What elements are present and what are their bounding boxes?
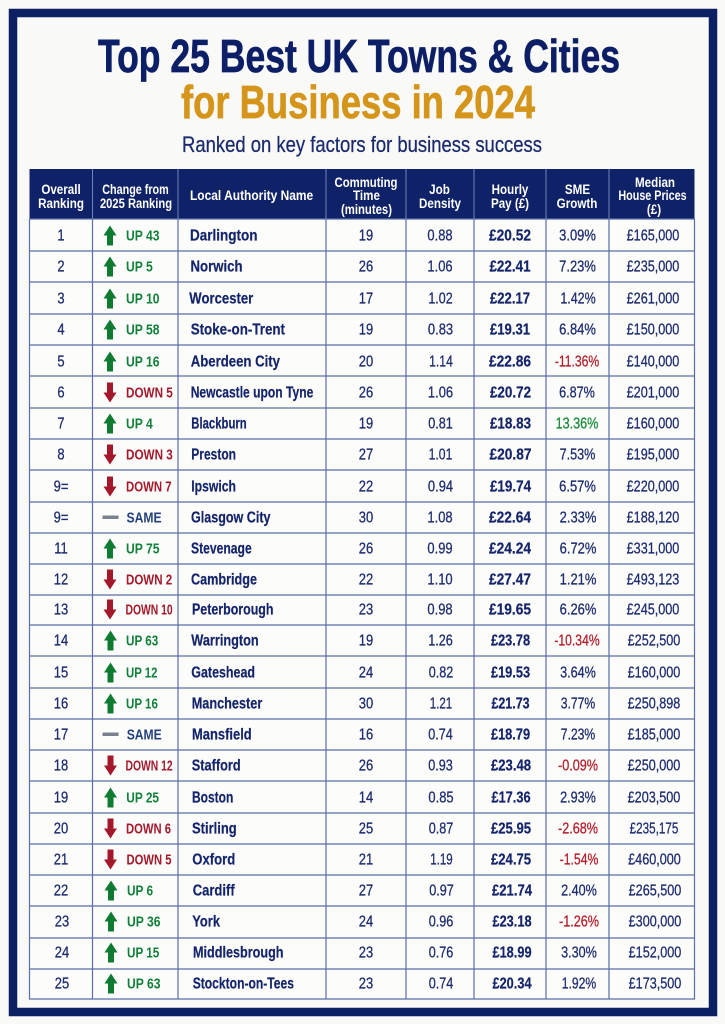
row 5: Aberdeen City: £22.86 — [489, 353, 531, 371]
row 3: Worcester: Worcester — [189, 290, 253, 308]
row 6: Newcastle upon Tyne: £201,000 — [627, 384, 679, 402]
row 13: Peterborough: DOWN 10 — [126, 601, 173, 618]
table header labels: Change from — [102, 182, 169, 197]
row 16: Manchester: 3.77% — [561, 695, 596, 713]
row 12: Cambridge: 12 — [54, 571, 68, 589]
row 10: Glasgow City: 30 — [359, 509, 373, 527]
row 20: Stirling: -2.68% — [558, 820, 598, 838]
row 11: Stevenage — [54, 538, 679, 558]
row 4: Stoke-on-Trent: £19.31 — [490, 321, 530, 339]
row 20: Stirling — [54, 818, 679, 838]
row 17: Mansfield: £185,000 — [628, 726, 680, 744]
row 25: Stockton-on-Tees: Stockton-on-Tees — [193, 976, 294, 992]
row 24: Middlesbrough: 24 — [55, 944, 69, 962]
row 21: Oxford: £24.75 — [491, 851, 531, 869]
row 18: Stafford — [54, 756, 680, 776]
row 16: Manchester: £250,898 — [628, 695, 680, 713]
row 23: York: 23 — [55, 913, 69, 931]
row 23: York: 24 — [359, 913, 373, 931]
row 18: Stafford: 26 — [359, 757, 373, 775]
row 2: Norwich: UP 5 — [126, 258, 153, 275]
row 24: Middlesbrough: 0.76 — [429, 944, 453, 962]
row 8: Preston: DOWN 3 — [126, 446, 173, 463]
table header background — [30, 169, 694, 219]
row 4: Stoke-on-Trent: 0.83 — [428, 321, 453, 339]
row 7: Blackburn: £18.83 — [490, 416, 531, 433]
row 16: Manchester: Manchester — [192, 696, 262, 712]
row 17: Mansfield: 17 — [54, 726, 68, 744]
row 12: Cambridge: £27.47 — [489, 571, 531, 589]
row 23: York: -1.26% — [559, 913, 599, 931]
row 23: York: UP 36 — [127, 913, 161, 930]
row 7: Blackburn — [57, 414, 679, 434]
row 6: Newcastle upon Tyne: 26 — [359, 384, 373, 402]
table header labels: (£) — [647, 201, 661, 217]
row 8: Preston: 27 — [359, 446, 373, 464]
row 22: Cardiff: £265,500 — [629, 882, 681, 900]
table header labels: Commuting — [335, 174, 397, 190]
table header labels: Local Authority Name — [190, 187, 313, 203]
row 21: Oxford: DOWN 5 — [126, 851, 171, 868]
row 15: Gateshead: Gateshead — [191, 664, 255, 682]
row 8: Preston: £20.87 — [489, 446, 532, 464]
row 18: Stafford: DOWN 12 — [126, 757, 173, 774]
table header labels: Growth — [557, 195, 597, 211]
row 21: Oxford: -1.54% — [560, 851, 599, 869]
row 5: Aberdeen City: £140,000 — [627, 353, 679, 371]
row 19: Boston: 2.93% — [560, 789, 596, 807]
row 18: Stafford: -0.09% — [558, 757, 598, 775]
row 12: Cambridge — [54, 570, 679, 590]
row 16: Manchester: UP 16 — [126, 695, 158, 712]
row 6: Newcastle upon Tyne: £20.72 — [490, 385, 531, 402]
row 24: Middlesbrough — [55, 942, 681, 962]
row 20: Stirling: £25.95 — [491, 820, 531, 838]
row 1: Darlington: 0.88 — [427, 227, 453, 245]
row 7: Blackburn: Blackburn — [191, 416, 247, 432]
row 4: Stoke-on-Trent: 4 — [57, 321, 65, 339]
row 8: Preston: Preston — [191, 446, 236, 464]
row 16: Manchester: 30 — [359, 695, 373, 713]
table header labels: 2025 Ranking — [100, 196, 172, 211]
row 21: Oxford — [54, 850, 681, 870]
row 12: Cambridge: 22 — [359, 571, 373, 589]
row 11: Stevenage: 6.72% — [560, 540, 596, 558]
row 14: Warrington: £252,500 — [628, 632, 680, 650]
row 6: Newcastle upon Tyne — [57, 382, 679, 402]
row 15: Gateshead: 0.82 — [429, 664, 453, 682]
row 19: Boston: 0.85 — [428, 789, 454, 807]
row 3: Worcester — [57, 288, 679, 308]
row 16: Manchester — [54, 694, 680, 714]
row 15: Gateshead: 15 — [54, 664, 68, 682]
table header labels: Overall — [41, 181, 81, 197]
row 3: Worcester: 1.42% — [560, 290, 596, 308]
row 4: Stoke-on-Trent: £150,000 — [627, 321, 679, 339]
row 17: Mansfield: 0.74 — [428, 726, 453, 744]
row 11: Stevenage: 26 — [359, 540, 373, 558]
row 17: Mansfield: 7.23% — [561, 726, 596, 744]
row 16: Manchester: £21.73 — [491, 695, 530, 713]
row 24: Middlesbrough: UP 15 — [127, 944, 160, 961]
row 10: Glasgow City: £188,120 — [627, 509, 679, 527]
row 9: Ipswich: DOWN 7 — [126, 478, 172, 495]
table header labels: Median — [635, 174, 675, 190]
row 20: Stirling: 0.87 — [429, 820, 453, 838]
table header labels — [38, 174, 687, 217]
row 22: Cardiff: Cardiff — [193, 882, 235, 900]
row 18: Stafford: 18 — [54, 757, 68, 775]
row 13: Peterborough: 0.98 — [427, 601, 453, 619]
row 2: Norwich: £235,000 — [627, 258, 679, 276]
row 25: Stockton-on-Tees: 1.92% — [562, 975, 597, 993]
table header labels: Hourly — [492, 181, 529, 197]
row 8: Preston: £195,000 — [627, 446, 679, 464]
row 10: Glasgow City: 2.33% — [560, 509, 596, 527]
row 19: Boston: 14 — [359, 789, 373, 807]
row 21: Oxford: 21 — [54, 851, 68, 869]
row 3: Worcester: UP 10 — [126, 290, 160, 307]
row 9: Ipswich: £19.74 — [490, 479, 532, 496]
row 6: Newcastle upon Tyne: Newcastle upon Tyne — [191, 384, 313, 402]
row 12: Cambridge: £493,123 — [627, 571, 679, 589]
row 6: Newcastle upon Tyne: 6.87% — [559, 384, 595, 402]
row 9: Ipswich: 22 — [359, 478, 373, 496]
row 12: Cambridge: DOWN 2 — [126, 571, 172, 588]
row 2: Norwich — [57, 256, 679, 276]
row 17: Mansfield: Mansfield — [192, 726, 252, 744]
row 2: Norwich: 26 — [359, 258, 373, 276]
row 18: Stafford: £250,000 — [628, 757, 680, 775]
row 11: Stevenage: 11 — [54, 540, 68, 558]
row 24: Middlesbrough: £18.99 — [492, 944, 532, 962]
subtitle: Ranked on key factors for business success — [182, 132, 542, 157]
row 22: Cardiff: 2.40% — [561, 882, 597, 900]
table header labels: House Prices — [618, 188, 687, 203]
row 15: Gateshead: £160,000 — [628, 664, 680, 682]
row 16: Manchester: 16 — [54, 695, 68, 713]
row 5: Aberdeen City: Aberdeen City — [191, 354, 280, 370]
row 25: Stockton-on-Tees: 23 — [359, 975, 373, 993]
row 5: Aberdeen City: 20 — [359, 353, 373, 371]
table body background — [30, 219, 694, 999]
row 17: Mansfield: SAME — [127, 726, 162, 743]
row 21: Oxford: £460,000 — [628, 851, 681, 869]
row 25: Stockton-on-Tees: 25 — [55, 975, 69, 993]
row 1: Darlington — [57, 226, 679, 246]
row 20: Stirling: 20 — [54, 820, 68, 838]
row 4: Stoke-on-Trent: UP 58 — [126, 321, 160, 338]
row 14: Warrington: Warrington — [191, 632, 259, 650]
row 19: Boston: 19 — [54, 789, 68, 807]
row 7: Blackburn: 19 — [359, 415, 373, 433]
table header labels: Pay (£) — [491, 195, 529, 211]
row 8: Preston: 7.53% — [560, 446, 596, 464]
row 21: Oxford: 1.19 — [430, 850, 453, 868]
table header labels: Time — [353, 187, 380, 203]
row 23: York — [55, 912, 681, 932]
row 10: Glasgow City: 9= — [54, 509, 68, 527]
row 9: Ipswich — [54, 476, 679, 496]
row 24: Middlesbrough: £152,000 — [629, 944, 681, 962]
row 13: Peterborough: £245,000 — [627, 601, 679, 619]
row 11: Stevenage: 0.99 — [427, 540, 453, 558]
row 14: Warrington: 19 — [359, 632, 373, 650]
row 24: Middlesbrough: Middlesbrough — [193, 944, 284, 962]
row 22: Cardiff: 27 — [359, 882, 373, 900]
row 22: Cardiff — [54, 880, 681, 900]
row 23: York: 0.96 — [429, 913, 453, 931]
row 11: Stevenage: £24.24 — [489, 540, 532, 558]
row 25: Stockton-on-Tees: £173,500 — [629, 975, 681, 993]
row 14: Warrington: 1.26 — [428, 632, 453, 650]
table header labels: Job — [429, 181, 450, 197]
row 22: Cardiff: £21.74 — [492, 882, 533, 900]
row 9: Ipswich: Ipswich — [191, 478, 236, 496]
row 9: Ipswich: 9= — [54, 478, 68, 496]
row 1: Darlington: Darlington — [190, 228, 258, 244]
row 14: Warrington: UP 63 — [126, 632, 158, 649]
row 19: Boston — [54, 788, 680, 808]
row 5: Aberdeen City: 1.14 — [429, 353, 453, 371]
row 13: Peterborough: Peterborough — [192, 602, 274, 618]
row 20: Stirling: DOWN 6 — [126, 820, 171, 837]
row 7: Blackburn: UP 4 — [126, 415, 153, 432]
row 25: Stockton-on-Tees: 0.74 — [429, 975, 453, 993]
row 7: Blackburn: 0.81 — [428, 415, 453, 433]
row 23: York: £300,000 — [629, 913, 681, 931]
row 15: Gateshead — [54, 662, 680, 682]
row 8: Preston — [57, 444, 679, 464]
row 22: Cardiff: 0.97 — [429, 882, 454, 900]
row 3: Worcester: 1.02 — [428, 290, 453, 308]
row 4: Stoke-on-Trent: 6.84% — [559, 321, 596, 339]
row 9: Ipswich: £220,000 — [627, 478, 679, 496]
row 14: Warrington: 14 — [54, 632, 68, 650]
row 7: Blackburn: 7 — [57, 415, 65, 433]
row 7: Blackburn: 13.36% — [556, 415, 599, 433]
row 24: Middlesbrough: 3.30% — [561, 944, 597, 962]
row 20: Stirling: Stirling — [192, 820, 237, 838]
row 2: Norwich: Norwich — [190, 258, 242, 276]
row 25: Stockton-on-Tees: UP 63 — [127, 975, 161, 992]
row 13: Peterborough: £19.65 — [489, 601, 531, 619]
row 1: Darlington: 19 — [359, 227, 373, 245]
row 15: Gateshead: UP 12 — [126, 664, 157, 681]
row 10: Glasgow City: £22.64 — [489, 509, 532, 527]
row 14: Warrington: £23.78 — [491, 632, 530, 650]
row 2: Norwich: 2 — [57, 258, 65, 276]
row 9: Ipswich: 0.94 — [428, 478, 453, 496]
row 12: Cambridge: Cambridge — [191, 572, 257, 588]
row 1: Darlington: 1 — [57, 227, 65, 245]
row 3: Worcester: £261,000 — [627, 290, 679, 308]
row 15: Gateshead: £19.53 — [491, 664, 530, 682]
row 10: Glasgow City: Glasgow City — [191, 510, 271, 526]
row 12: Cambridge: 1.10 — [427, 571, 453, 589]
title: for Business in 2024 — [181, 76, 535, 128]
row 20: Stirling: 25 — [359, 820, 373, 838]
row 6: Newcastle upon Tyne: DOWN 5 — [126, 384, 173, 401]
row 23: York: York — [192, 914, 220, 930]
row 13: Peterborough: 13 — [54, 601, 68, 619]
row 10: Glasgow City — [54, 509, 679, 527]
table header labels: SME — [565, 181, 590, 197]
row 4: Stoke-on-Trent: Stoke-on-Trent — [191, 322, 286, 338]
title — [98, 30, 620, 128]
row 2: Norwich: 1.06 — [427, 258, 453, 276]
row 23: York: £23.18 — [492, 913, 532, 931]
row 15: Gateshead: 24 — [359, 664, 373, 682]
row 11: Stevenage: UP 75 — [126, 540, 160, 557]
row 11: Stevenage: Stevenage — [191, 540, 252, 558]
row 10: Glasgow City: 1.08 — [427, 509, 453, 527]
row 18: Stafford: 0.93 — [428, 757, 453, 775]
row 1: Darlington: £20.52 — [489, 227, 531, 245]
row 8: Preston: 8 — [57, 446, 65, 464]
row 19: Boston: £17.36 — [491, 789, 531, 807]
row 1: Darlington: UP 43 — [126, 227, 160, 244]
row 6: Newcastle upon Tyne: 1.06 — [428, 384, 453, 402]
row 11: Stevenage: £331,000 — [627, 540, 679, 558]
row 21: Oxford: 21 — [359, 851, 373, 869]
row 17: Mansfield: £18.79 — [491, 726, 530, 744]
row 2: Norwich: £22.41 — [489, 259, 531, 276]
row 3: Worcester: 17 — [359, 290, 373, 308]
row 15: Gateshead: 3.64% — [560, 664, 596, 682]
row 14: Warrington: -10.34% — [554, 632, 600, 650]
row 5: Aberdeen City: 5 — [57, 353, 65, 371]
row 25: Stockton-on-Tees — [55, 974, 681, 994]
row 5: Aberdeen City: -11.36% — [555, 353, 599, 371]
row 24: Middlesbrough: 23 — [359, 944, 373, 962]
row 12: Cambridge: 1.21% — [560, 571, 596, 589]
row 1: Darlington: £165,000 — [627, 227, 679, 245]
row 22: Cardiff: 22 — [54, 882, 68, 900]
table header labels: (minutes) — [341, 201, 392, 217]
row 25: Stockton-on-Tees: £20.34 — [492, 975, 532, 993]
row 22: Cardiff: UP 6 — [127, 882, 154, 899]
row 8: Preston: 1.01 — [429, 446, 452, 464]
row 5: Aberdeen City: UP 16 — [126, 353, 160, 370]
row 17: Mansfield — [54, 726, 680, 744]
row 21: Oxford: Oxford — [192, 852, 235, 868]
row 1: Darlington: 3.09% — [559, 227, 596, 245]
row 19: Boston: £203,500 — [628, 789, 680, 807]
row 16: Manchester: 1.21 — [430, 694, 452, 712]
row 20: Stirling: £235,175 — [630, 819, 679, 837]
row 17: Mansfield: 16 — [359, 726, 373, 744]
row 13: Peterborough: 23 — [359, 601, 373, 619]
row 18: Stafford: Stafford — [192, 758, 241, 774]
row 10: Glasgow City: SAME — [126, 509, 162, 526]
table header labels: Ranking — [38, 195, 84, 211]
row 5: Aberdeen City — [57, 352, 679, 372]
row 19: Boston: Boston — [192, 790, 233, 806]
row 13: Peterborough: 6.26% — [560, 601, 596, 619]
row 4: Stoke-on-Trent — [57, 320, 679, 340]
row 7: Blackburn: £160,000 — [627, 415, 679, 433]
row 9: Ipswich: 6.57% — [559, 478, 596, 496]
row 3: Worcester: £22.17 — [490, 290, 530, 308]
row 14: Warrington — [54, 630, 680, 650]
row 3: Worcester: 3 — [57, 290, 65, 308]
row 19: Boston: UP 25 — [126, 789, 159, 806]
row 4: Stoke-on-Trent: 19 — [359, 321, 373, 339]
row 6: Newcastle upon Tyne: 6 — [57, 384, 65, 402]
row 2: Norwich: 7.23% — [559, 258, 596, 276]
row 18: Stafford: £23.48 — [491, 757, 531, 775]
table header labels: Density — [419, 195, 462, 211]
row 13: Peterborough — [54, 600, 679, 620]
